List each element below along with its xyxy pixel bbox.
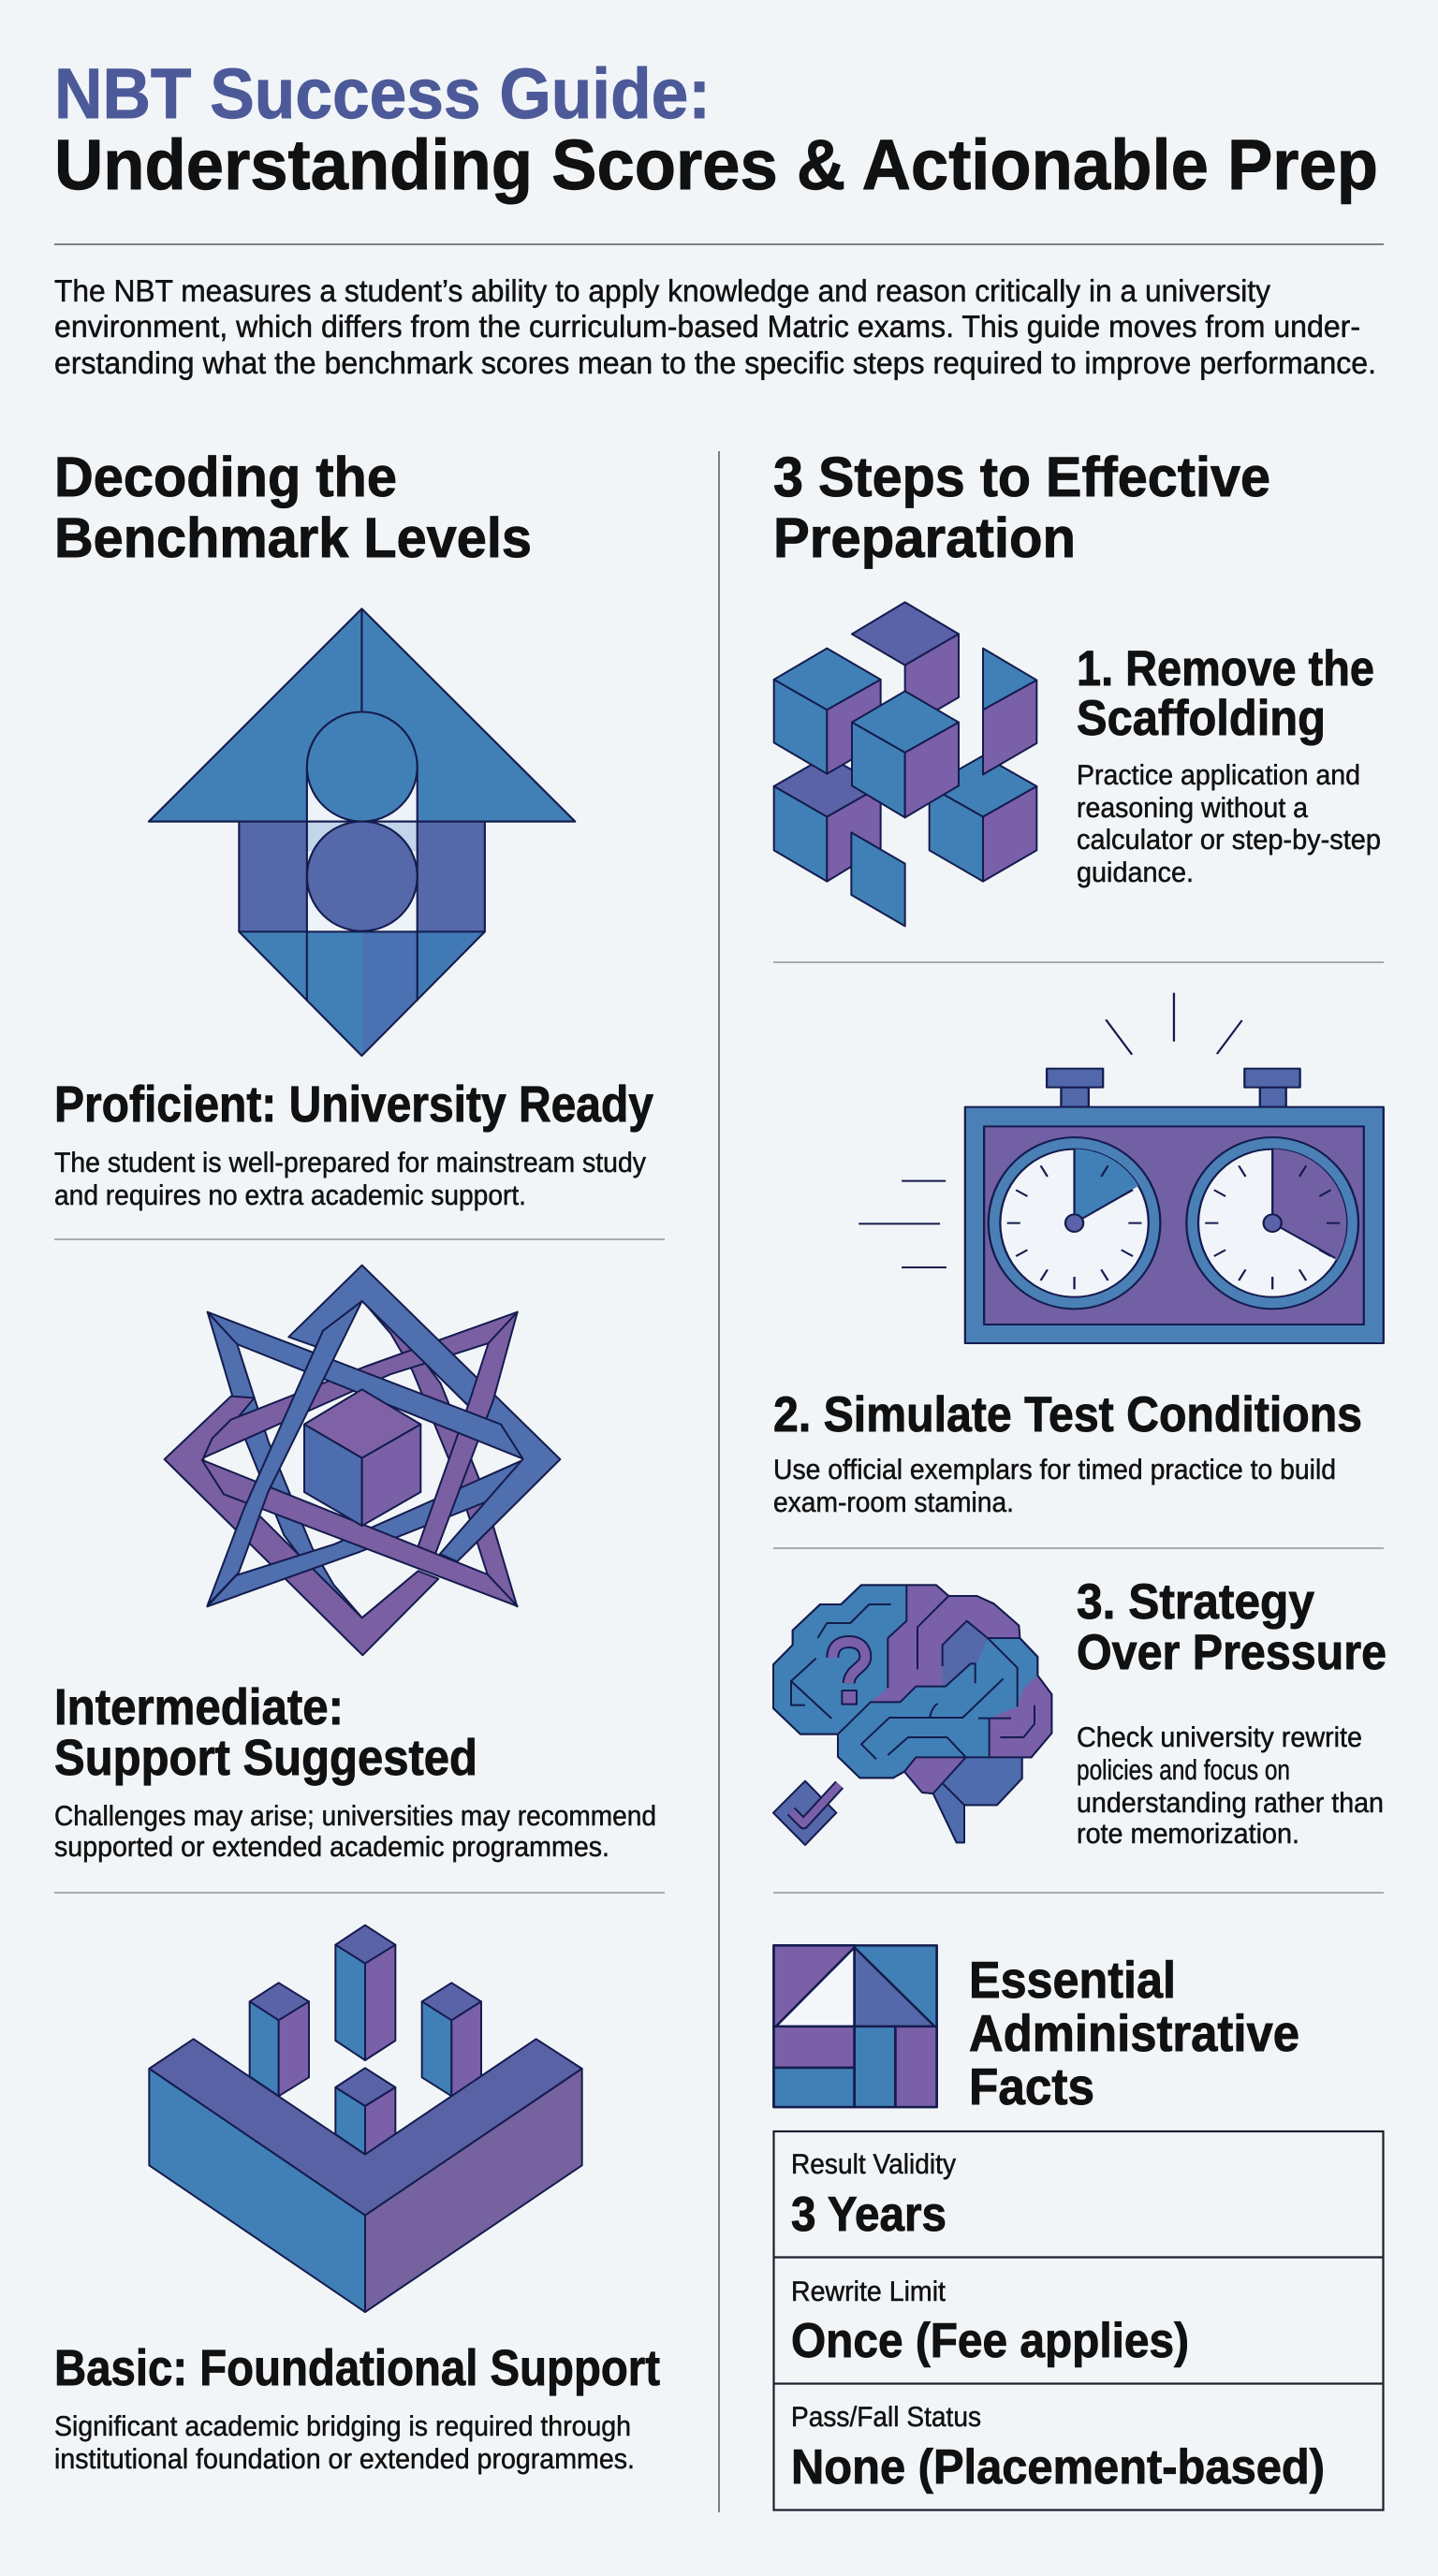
panel: decoding the benchmark levels [54,446,665,2475]
heading: decoding the benchmark levels: Decoding the [54,446,397,508]
level: intermediate: supported or extended academic programmes. [54,1832,609,1863]
level: intermediate: Support Suggested [54,1730,477,1786]
fact: pass/fall status [791,2402,1325,2495]
heading: decoding the benchmark levels [54,446,532,569]
title [54,54,1378,205]
level: intermediate [54,1679,656,1863]
step 1 text: guidance. [1077,857,1194,888]
icon: scaffolding cubes [774,602,1036,926]
level: intermediate: Intermediate: [54,1679,344,1735]
step 1 text: Scaffolding [1077,691,1326,746]
icon: foundation blocks [149,1925,582,2312]
fact: pass/fall status: Pass/Fall Status [791,2402,981,2433]
step 3 text: 3. Strategy [1077,1574,1314,1630]
panel: 3 steps to effective preparation [773,446,1387,2510]
heading: essential administrative facts: Administrative [969,2004,1299,2062]
heading: 3 steps: 3 Steps to Effective [773,446,1270,508]
intro text block: environment, which differs from the curriculum-based Matric exams. This guide moves from under- [54,309,1360,344]
intro text block [54,273,1376,380]
icon: brain with question mark and check [773,1585,1051,1845]
step 1 text: calculator or step-by-step [1077,825,1381,856]
step 1 text: reasoning without a [1077,793,1308,824]
title: Understanding Scores & Actionable Prep [54,125,1378,205]
heading: essential administrative facts [969,1951,1299,2115]
fact: pass/fall status: None (Placement-based) [791,2440,1325,2495]
fact: result validity: Result Validity [791,2149,956,2180]
intro text block: erstanding what the benchmark scores mean to the specific steps required to improve performance. [54,345,1376,380]
fact: rewrite limit: Rewrite Limit [791,2276,946,2307]
fact: result validity: 3 Years [791,2188,946,2242]
level: intermediate: Challenges may arise; universities may recommend [54,1801,656,1832]
level: basic: Significant academic bridging is required through [54,2411,631,2442]
heading: 3 steps [773,446,1270,569]
fact: rewrite limit: Once (Fee applies) [791,2314,1189,2368]
step 2 text: exam-room stamina. [773,1487,1014,1518]
fact: rewrite limit [791,2276,1189,2368]
icon: geometric tile square [774,1945,937,2107]
step 3 text [1077,1574,1387,1850]
heading: decoding the benchmark levels: Benchmark Levels [54,506,532,569]
icon: chess clock [858,993,1384,1343]
step 2 text: 2. Simulate Test Conditions [773,1387,1362,1442]
step 1 text [1077,641,1381,888]
level: proficient: and requires no extra academic support. [54,1180,526,1211]
level: proficient [54,1076,653,1211]
heading: essential administrative facts: Essential [969,1951,1176,2009]
step 3 text: policies and focus on [1077,1755,1290,1786]
step 2 text: Use official exemplars for timed practice to build [773,1455,1336,1486]
level: basic: institutional foundation or extended programmes. [54,2444,635,2475]
step 2 text [773,1387,1362,1518]
level: basic: Basic: Foundational Support [54,2340,660,2396]
level: proficient: The student is well-prepared for mainstream study [54,1148,646,1178]
intro text block: The NBT measures a student’s ability to apply knowledge and reason critically in a university [54,273,1270,308]
heading: essential administrative facts: Facts [969,2057,1094,2115]
heading: 3 steps: Preparation [773,506,1076,569]
title: NBT Success Guide: [54,54,711,134]
step 1 text: Practice application and [1077,760,1360,791]
icon: interlaced star with cube [165,1266,560,1655]
facts table [773,2131,1384,2510]
icon: upward arrow with circles [149,608,575,1056]
step 3 text: understanding rather than [1077,1788,1384,1819]
step 3 text: Check university rewrite [1077,1722,1362,1753]
level: basic [54,2340,660,2475]
step 3 text: rote memorization. [1077,1819,1299,1850]
step 1 text: 1. Remove the [1077,641,1374,696]
fact: result validity [791,2149,956,2242]
step 3 text: Over Pressure [1077,1625,1387,1680]
level: proficient: Proficient: University Ready [54,1076,653,1133]
